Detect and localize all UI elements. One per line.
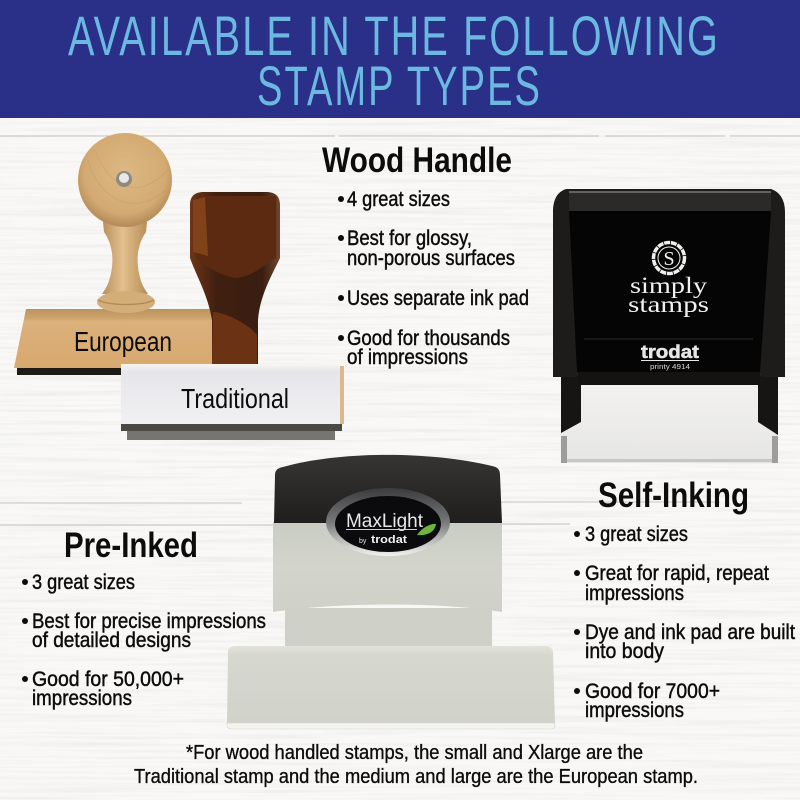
- title banner: [0, 0, 800, 118]
- heading: Wood Handle: Wood Handle: [322, 141, 512, 180]
- list: Self-Inking features: [574, 523, 795, 722]
- product: self-inking stamp: [553, 189, 785, 463]
- logo text: trodat printy 4914: trodat: [641, 342, 699, 362]
- logo text: simply stamps: stamps: [628, 292, 709, 317]
- list: Wood Handle features: non-porous surfaces: [347, 247, 515, 270]
- title line 2: STAMP TYPES: [257, 54, 542, 117]
- logo: simply stamps seal: [654, 242, 684, 274]
- list: Wood Handle features: [338, 188, 529, 369]
- logo: simply stamps seal: S: [663, 248, 675, 270]
- logo text: simply stamps: simply: [630, 273, 708, 298]
- footnote: [134, 742, 698, 788]
- heading: Pre-Inked: Pre-Inked: [64, 526, 198, 565]
- list: Pre-Inked features: Best for precise impressions: [32, 610, 266, 633]
- product: pre-inked MaxLight stamp: [227, 455, 555, 729]
- list: Wood Handle features: Best for glossy,: [347, 227, 472, 250]
- list: Self-Inking features: into body: [585, 640, 664, 663]
- footnote: *For wood handled stamps, the small and Xlarge are the: [186, 742, 643, 764]
- list: Self-Inking features: 3 great sizes: [585, 523, 688, 546]
- logo text: simply stamps: [628, 273, 709, 317]
- list: Self-Inking features: impressions: [585, 582, 684, 605]
- footnote: Traditional stamp and the medium and large are the European stamp.: [134, 766, 698, 788]
- logo: MaxLight by trodat: by: [359, 538, 367, 545]
- product: European wood stamp: [14, 133, 212, 375]
- product: Traditional wood stamp: [121, 192, 344, 440]
- logo: MaxLight by trodat: trodat: [371, 534, 407, 546]
- list: Wood Handle features: Good for thousands: [347, 327, 510, 350]
- logo text: trodat printy 4914: printy 4914: [650, 364, 690, 371]
- list: Wood Handle features: Uses separate ink pad: [347, 287, 529, 310]
- list: Self-Inking features: impressions: [585, 699, 684, 722]
- heading: Self-Inking: Self-Inking: [598, 476, 749, 515]
- list: Pre-Inked features: Good for 50,000+: [32, 668, 184, 691]
- list: Wood Handle features: of impressions: [347, 346, 468, 369]
- logo: MaxLight by trodat: MaxLight: [346, 511, 424, 532]
- logo text: trodat printy 4914: [641, 342, 699, 371]
- label: Traditional: Traditional: [181, 383, 289, 414]
- list: Wood Handle features: 4 great sizes: [347, 188, 450, 211]
- list: Self-Inking features: Good for 7000+: [585, 680, 720, 703]
- label: European: European: [74, 326, 172, 357]
- list: Pre-Inked features: impressions: [32, 687, 132, 710]
- list: Self-Inking features: Great for rapid, repeat: [585, 562, 769, 585]
- list: Pre-Inked features: of detailed designs: [32, 629, 191, 652]
- list: Pre-Inked features: [22, 571, 266, 710]
- logo: MaxLight by trodat: [326, 488, 450, 556]
- list: Pre-Inked features: 3 great sizes: [32, 571, 135, 594]
